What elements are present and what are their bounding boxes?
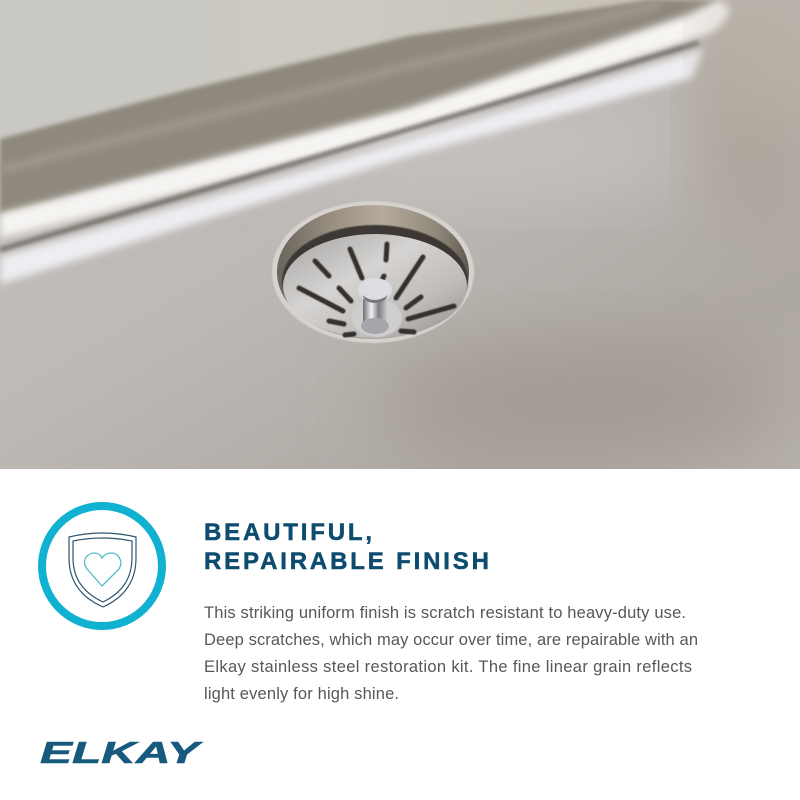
drain	[272, 201, 474, 343]
drain outer lip	[272, 201, 474, 343]
body text	[204, 604, 698, 703]
heading: REPAIRABLE FINISH	[204, 548, 489, 575]
sink rim: shadow line	[0, 43, 699, 250]
body text: This striking uniform finish is scratch resistant to heavy-duty use.	[204, 604, 686, 622]
body text: Deep scratches, which may occur over time, are repairable with an	[204, 631, 698, 649]
strainer plate	[283, 234, 467, 338]
sink rim: lower white band	[0, 48, 704, 284]
sink rim: dark band	[0, 0, 720, 214]
sink basin floor	[0, 0, 800, 469]
strainer slots	[299, 244, 454, 335]
sink corner	[686, 2, 765, 78]
strainer knob	[352, 278, 402, 337]
heart	[85, 553, 121, 586]
icon: shield with heart in circle	[42, 506, 162, 626]
panel: white text panel	[0, 469, 800, 800]
logo: Elkay: ELKAY	[40, 735, 204, 770]
body text: light evenly for high shine.	[204, 685, 399, 703]
icon ring	[42, 506, 162, 626]
photo: stainless steel sink with drain strainer	[0, 0, 800, 469]
sink rim: brown fade	[0, 4, 660, 170]
sink upper wall	[0, 0, 634, 136]
heading: BEAUTIFUL,	[204, 519, 372, 546]
drain inner well	[277, 205, 469, 339]
body text: Elkay stainless steel restoration kit. The fine linear grain reflects	[204, 658, 692, 676]
shield outline	[69, 533, 136, 607]
sink rim: bright highlight	[0, 0, 730, 238]
heading	[204, 519, 489, 575]
